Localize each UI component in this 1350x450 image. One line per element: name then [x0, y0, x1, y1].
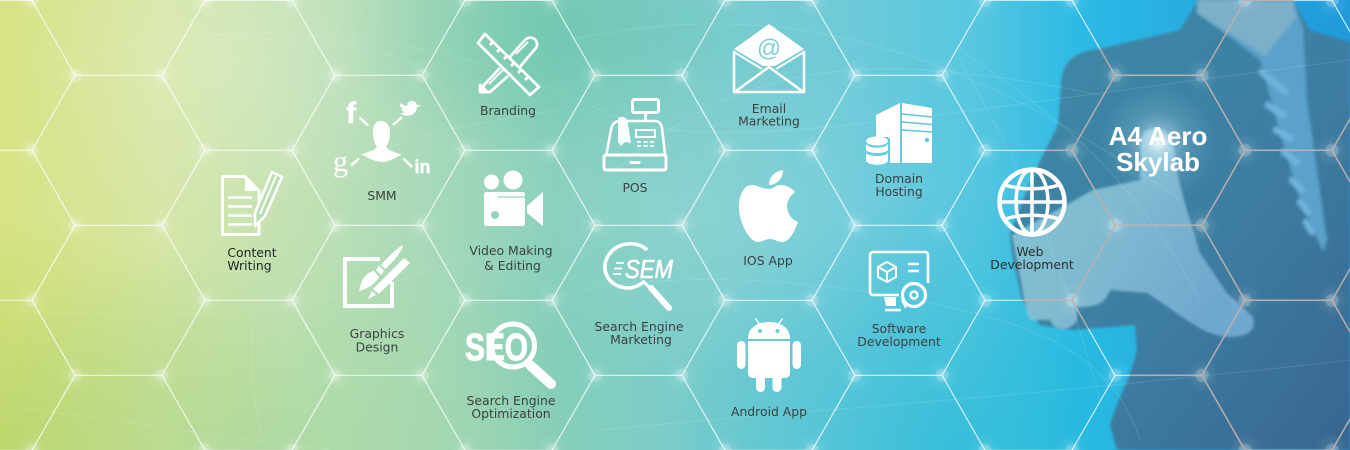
icon: crossed ruler and pencil [478, 34, 539, 95]
hexagon network over the figure [1022, 0, 1350, 450]
label: Search Engine [595, 319, 683, 334]
label: Domain [875, 171, 923, 186]
icon: android robot [737, 318, 801, 392]
icon: globe [1000, 170, 1064, 234]
icon: social network person: in [414, 157, 430, 177]
service: POS [604, 100, 666, 195]
icon: cash register [604, 100, 666, 170]
service: Search Engine Optimization [465, 324, 555, 421]
label: POS [622, 180, 648, 195]
label: Search Engine [467, 393, 555, 408]
icon: monitor, cube and disc [870, 252, 928, 310]
icon: canvas with brush and pencil [345, 245, 410, 306]
label: Android App [731, 404, 807, 419]
label: IOS App [743, 253, 793, 268]
service: Email Marketing [734, 24, 804, 128]
service: Domain Hosting [866, 103, 932, 199]
neck [1197, 0, 1296, 56]
label: Development [990, 257, 1074, 272]
icon: document and pencil [222, 172, 282, 234]
label: Writing [227, 258, 272, 273]
service: Branding [478, 34, 539, 118]
hand [1012, 128, 1254, 337]
label: Web [1016, 244, 1044, 259]
service: Graphics Design [345, 245, 410, 354]
service: Web Development [990, 170, 1074, 272]
shirt [1197, 0, 1327, 252]
label: Development [857, 334, 941, 349]
service: iOS App [739, 170, 798, 268]
label: Marketing [610, 332, 672, 347]
service: Content Writing [222, 172, 282, 273]
man in suit pointing [1010, 0, 1350, 450]
label: SMM [367, 188, 397, 203]
icon: SEM magnifier: SEM [625, 254, 673, 284]
label: Graphics [350, 326, 404, 341]
label: Content [227, 245, 277, 260]
icon: video camera [484, 170, 543, 226]
icon: social network person: g [333, 145, 348, 178]
icon: social network person [333, 97, 430, 178]
service: Android App [731, 318, 807, 419]
title: A4 Aero Skylab: Skylab [1116, 147, 1200, 177]
icon: server and database [866, 103, 932, 165]
label: Marketing [738, 114, 800, 128]
icon: open envelope: @ [757, 35, 781, 62]
tie [1262, 72, 1312, 232]
label: Email [752, 101, 786, 116]
label: Software [872, 321, 926, 336]
label: Optimization [471, 406, 551, 421]
label: Hosting [875, 184, 923, 199]
service: SMM [333, 97, 430, 203]
label: Design [356, 340, 398, 354]
service: Software Development [857, 252, 941, 349]
service: Search Engine Marketing [595, 244, 683, 347]
icon: apple [739, 170, 798, 242]
icon: social network person: f [346, 97, 357, 130]
title: A4 Aero Skylab: A4 Aero [1109, 121, 1207, 151]
label: Video Making [469, 243, 553, 258]
label: & Editing [484, 258, 541, 273]
icon: SEO magnifier: SEO [465, 327, 528, 369]
label: Branding [480, 103, 536, 118]
fingertip glow [1100, 85, 1216, 201]
service: Video Making and Editing [469, 170, 553, 273]
jacket [1010, 0, 1350, 450]
